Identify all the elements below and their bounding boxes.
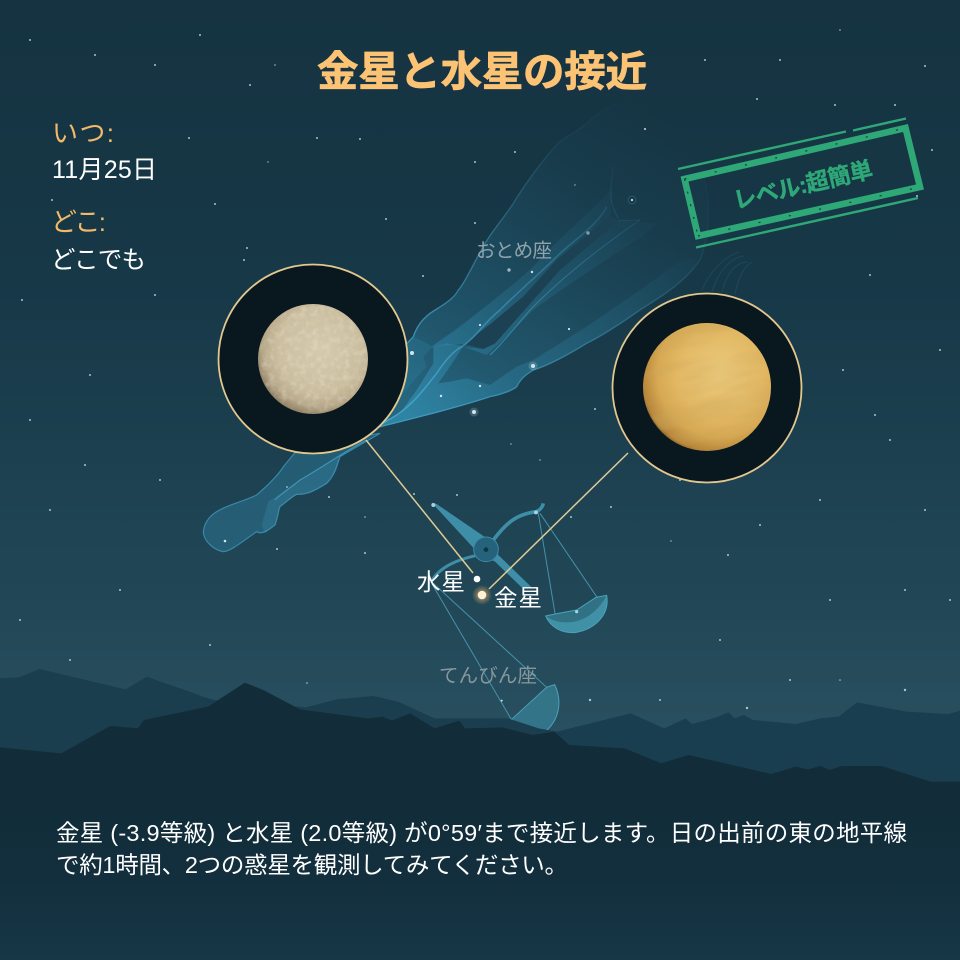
leg highlight (275, 440, 367, 500)
planet: Venus (632, 312, 782, 462)
constellation: Libra (431, 503, 607, 733)
stamp text: レベル:超簡単 (731, 156, 875, 214)
band left of gap (432, 187, 613, 347)
constellation label: Virgo: おとめ座 (476, 240, 552, 262)
where block: どこ: (51, 207, 106, 237)
constellation: Virgo figure (203, 102, 752, 552)
dark gap between thighs (465, 216, 618, 349)
marker: Venus (472, 585, 492, 605)
stamp wear marks (684, 128, 920, 236)
scale pan lower (512, 685, 559, 733)
Mercury inset (218, 264, 408, 454)
connector line: Venus (489, 453, 628, 589)
star field (19, 29, 951, 709)
description (56, 820, 907, 878)
near mountains (0, 683, 960, 960)
hair strands (702, 252, 752, 294)
figure stars (224, 196, 636, 542)
hip shading (367, 337, 433, 430)
scale arms (432, 553, 487, 581)
scale pan right (546, 595, 607, 633)
foreground ground (0, 800, 960, 960)
marker: Mercury (474, 576, 480, 582)
when block: 11月25日 (52, 156, 157, 184)
scale hub (474, 537, 498, 562)
band right of gap (463, 221, 660, 355)
far mountains (0, 669, 960, 817)
label: Mercury: 水星 (417, 569, 465, 595)
planet: Mercury (258, 304, 368, 414)
contour highlights (383, 167, 640, 423)
description: で約1時間、2つの惑星を観測してみてください。 (56, 852, 568, 878)
lower leg band (367, 257, 700, 430)
where block: どこでも (51, 247, 146, 274)
foot silhouette (203, 433, 380, 552)
title: 金星と水星の接近 (317, 48, 647, 95)
calf overlay (262, 443, 360, 533)
stamp: difficulty level (678, 118, 920, 248)
label: Venus: 金星 (494, 585, 542, 611)
where block (51, 207, 146, 274)
foot and lower leg (203, 433, 380, 552)
connector line: Mercury (366, 440, 473, 573)
upper body and thigh (367, 102, 708, 430)
when block: いつ: (52, 118, 114, 148)
body silhouette (367, 102, 708, 430)
when block (52, 118, 157, 184)
scale beam (432, 503, 532, 587)
scale strings (432, 513, 597, 720)
description: 金星 (-3.9等級) と水星 (2.0等級) が0°59′まで接近します。日の出前の東の地平線 (56, 820, 907, 846)
Venus inset (612, 294, 802, 482)
constellation label: Libra: てんびん座 (439, 665, 537, 687)
